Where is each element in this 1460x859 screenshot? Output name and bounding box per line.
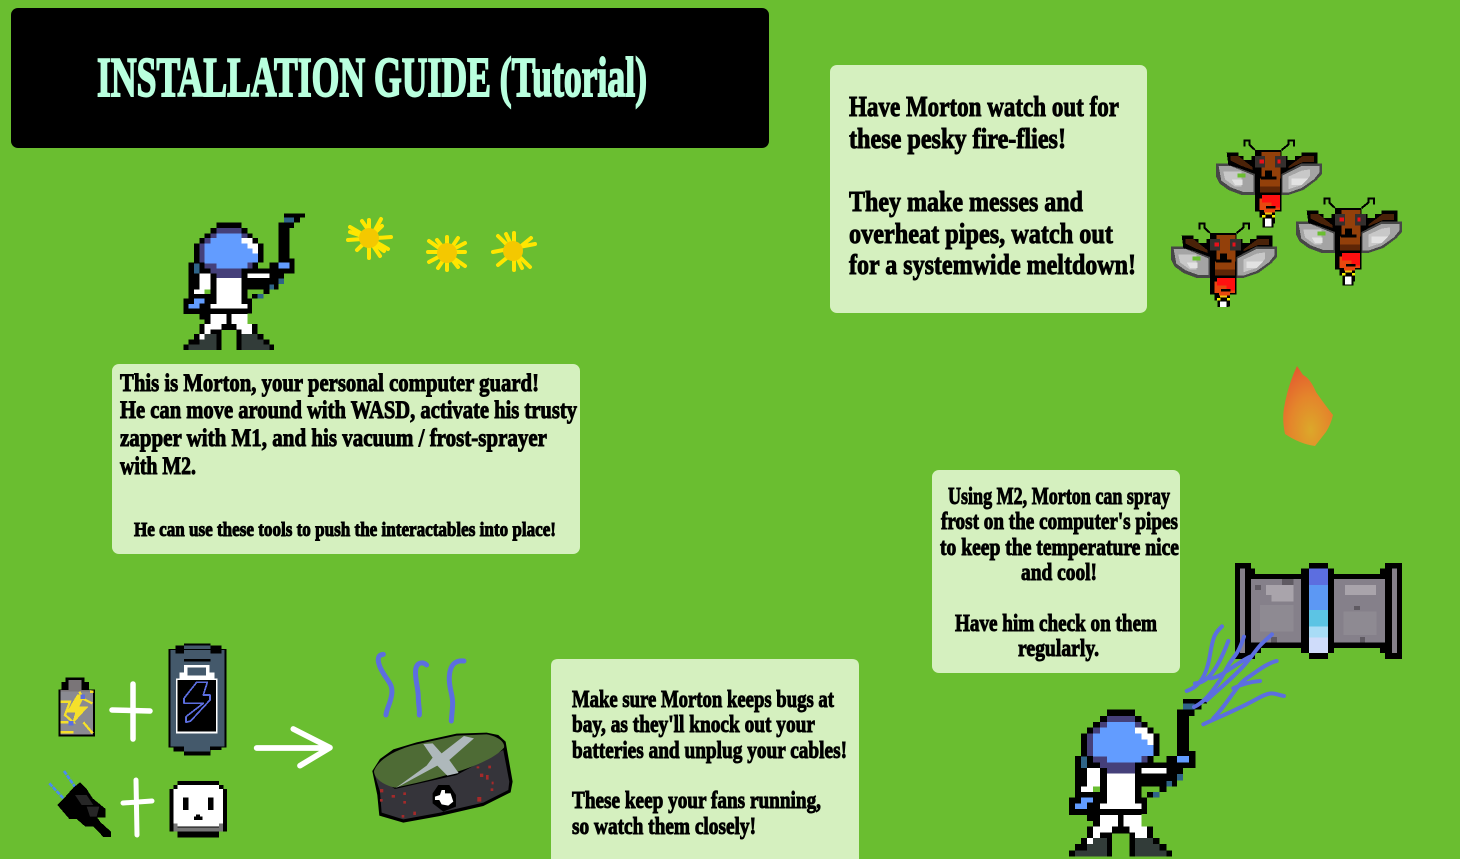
icon: computer fan [372, 733, 513, 823]
icon: white arrow [257, 729, 330, 766]
icon: frost spray [1187, 626, 1284, 724]
panel: bugs warning [551, 659, 859, 859]
frost text: frost on the computer's pipes [941, 509, 1178, 535]
icon: heat waves [378, 654, 464, 721]
icon: plus sign (batteries) [112, 684, 150, 739]
icon: cable plug [49, 771, 111, 837]
panel: frost spray instructions [932, 470, 1180, 673]
intro text: He can use these tools to push the interactables into place! [134, 519, 556, 541]
panel: Morton intro [112, 364, 580, 554]
bugs text: Make sure Morton keeps bugs at [572, 687, 834, 713]
icon: yellow zapper sparks [348, 219, 535, 270]
intro text: with M2. [120, 453, 196, 480]
frost text: Using M2, Morton can spray [948, 484, 1170, 510]
fire-flies text [849, 91, 1136, 281]
bugs text: batteries and unplug your cables! [572, 738, 847, 764]
frost text: to keep the temperature nice [940, 535, 1179, 561]
frost text: Have him check on them [955, 611, 1157, 637]
title: INSTALLATION GUIDE (Tutorial) [97, 47, 647, 109]
intro text: He can move around with WASD, activate his trusty [120, 397, 577, 424]
icon: Morton spraying frost [1069, 699, 1207, 856]
frost text: regularly. [1018, 636, 1099, 662]
fire-flies text: Have Morton watch out for [849, 91, 1119, 123]
panel: fire-flies warning [830, 65, 1147, 313]
icon: flame [1283, 366, 1333, 446]
frost text: and cool! [1021, 560, 1097, 586]
bugs text: These keep your fans running, [572, 788, 821, 814]
icon: three fire-flies [1171, 140, 1402, 313]
fire-flies text: They make messes and [849, 186, 1083, 218]
intro text [120, 370, 577, 541]
fire-flies text: these pesky fire-flies! [849, 123, 1066, 155]
icon: wall outlet [169, 781, 227, 838]
bugs text: bay, as they'll knock out your [572, 712, 815, 738]
icon: large battery [168, 643, 227, 756]
icon: Morton character with zapper [183, 213, 305, 350]
icon: plus sign (cable) [123, 780, 152, 835]
title banner [11, 8, 769, 148]
icon: computer pipe [1235, 563, 1402, 659]
icon: small battery [58, 677, 95, 737]
bugs text: so watch them closely! [572, 814, 756, 840]
fire-flies text: for a systemwide meltdown! [849, 249, 1136, 281]
fire-flies text: overheat pipes, watch out [849, 218, 1113, 250]
intro text: zapper with M1, and his vacuum / frost-sprayer [120, 425, 547, 452]
intro text: This is Morton, your personal computer guard! [120, 370, 539, 397]
frost text [940, 484, 1179, 662]
bugs text [572, 687, 847, 840]
